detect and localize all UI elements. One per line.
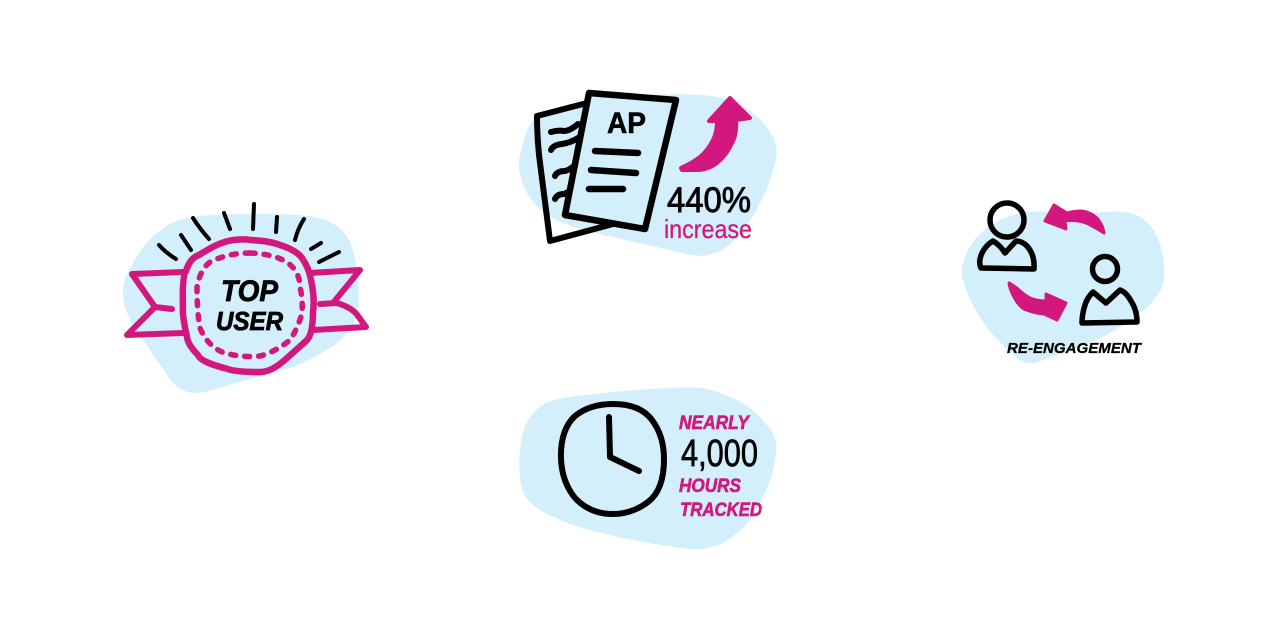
panel: re-engagement xyxy=(962,203,1164,363)
label: increase: increase xyxy=(664,214,752,244)
text: nearly 4,000 hours tracked xyxy=(679,413,762,521)
icon: up arrow xyxy=(681,98,750,170)
icon: arrow bottom xyxy=(1009,283,1066,320)
icon: person one xyxy=(980,203,1034,269)
panel: clock hours tracked xyxy=(519,387,777,549)
icon: ribbon xyxy=(127,270,366,335)
heading: TOP USER xyxy=(216,275,283,336)
icon: front page xyxy=(565,93,676,229)
icon: back page xyxy=(537,103,613,241)
heading: TOP USER: TOP xyxy=(221,275,279,308)
text: nearly 4,000 hours tracked: TRACKED xyxy=(680,500,762,521)
heading: TOP USER: USER xyxy=(216,306,283,336)
label: re-engagement: RE-ENGAGEMENT xyxy=(1007,340,1143,357)
icon: rays xyxy=(159,204,339,262)
icon: clock xyxy=(561,404,664,514)
panel: top user badge xyxy=(123,204,366,393)
text: nearly 4,000 hours tracked: NEARLY xyxy=(679,413,751,434)
blob: badge background xyxy=(123,214,359,393)
stat: 440%: 440% xyxy=(667,181,751,220)
icon: dashed inner ring xyxy=(197,253,302,356)
blob: re-engagement background xyxy=(962,212,1164,363)
blob: documents background xyxy=(519,94,777,256)
icon: person two xyxy=(1082,256,1137,323)
label: AP: AP xyxy=(607,107,646,140)
icon: arrow top xyxy=(1045,205,1104,233)
text: nearly 4,000 hours tracked: 4,000 xyxy=(681,433,758,475)
icon: badge outline xyxy=(183,239,314,372)
text: nearly 4,000 hours tracked: HOURS xyxy=(679,476,741,497)
panel: AP documents 440% increase xyxy=(519,93,777,256)
blob: clock background xyxy=(519,387,777,549)
